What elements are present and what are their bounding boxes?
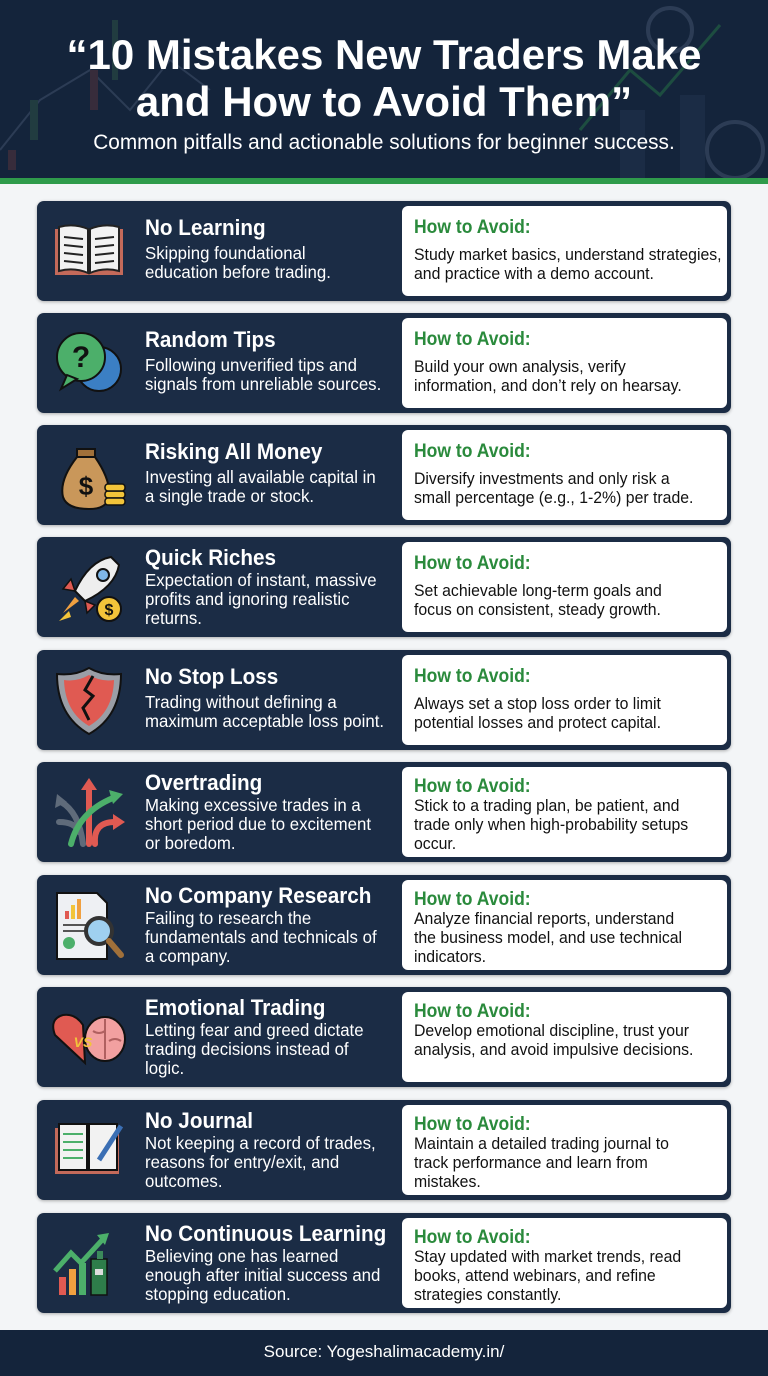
icon: heart vs brain xyxy=(52,1014,126,1066)
how to avoid box: How to Avoid: xyxy=(414,552,531,574)
how to avoid box: books, attend webinars, and refine xyxy=(414,1266,656,1284)
header xyxy=(0,0,768,178)
icon: journal with pen xyxy=(55,1123,123,1174)
mistake description: trading decisions instead of xyxy=(145,1039,349,1059)
card 3: Risking All Money xyxy=(37,425,731,525)
how to avoid box: indicators. xyxy=(414,946,486,966)
mistake title: No Learning xyxy=(145,215,266,240)
card 7: No Company Research xyxy=(37,875,731,975)
how to avoid box: How to Avoid: xyxy=(414,1000,531,1022)
icon: report with magnifier xyxy=(56,892,124,960)
icon: money bag xyxy=(61,448,126,510)
mistake description: maximum acceptable loss point. xyxy=(145,711,384,731)
how to avoid box xyxy=(402,655,727,745)
mistake description: profits and ignoring realistic xyxy=(145,589,350,609)
icon: money bag: $ xyxy=(79,471,94,501)
mistake description: Trading without defining a xyxy=(145,692,337,712)
mistake description: a single trade or stock. xyxy=(145,486,314,506)
how to avoid box: Maintain a detailed trading journal to xyxy=(414,1134,669,1152)
how to avoid box xyxy=(402,1218,727,1308)
mistake description: education before trading. xyxy=(145,262,331,282)
how to avoid box: How to Avoid: xyxy=(414,216,531,238)
how to avoid box: How to Avoid: xyxy=(414,665,531,687)
how to avoid box: How to Avoid: xyxy=(414,775,531,797)
how to avoid box xyxy=(402,206,727,296)
mistake title: Emotional Trading xyxy=(145,995,325,1020)
how to avoid box: track performance and learn from xyxy=(414,1152,648,1172)
mistake description: short period due to excitement xyxy=(145,814,371,834)
mistake description xyxy=(145,692,384,731)
subtitle: Common pitfalls and actionable solutions for beginner success. xyxy=(93,131,675,154)
how to avoid box: How to Avoid: xyxy=(414,440,531,462)
mistake description: Believing one has learned xyxy=(145,1246,338,1266)
how to avoid box: Always set a stop loss order to limit xyxy=(414,694,661,712)
mistake description xyxy=(145,467,376,506)
mistake description xyxy=(145,1246,380,1304)
title: and How to Avoid Them” xyxy=(136,78,632,125)
icon: broken shield xyxy=(56,667,122,735)
mistake description: outcomes. xyxy=(145,1171,223,1191)
mistake description: logic. xyxy=(145,1058,184,1078)
how to avoid box: Build your own analysis, verify xyxy=(414,356,626,376)
icon: heart vs brain: VS xyxy=(74,1034,93,1050)
icon: rocket xyxy=(59,556,122,622)
how to avoid box: the business model, and use technical xyxy=(414,928,682,946)
how to avoid box: and practice with a demo account. xyxy=(414,264,654,282)
how to avoid box: How to Avoid: xyxy=(414,1226,531,1248)
how to avoid box xyxy=(402,430,727,520)
mistake description: Following unverified tips and xyxy=(145,355,357,375)
how to avoid box: information, and don’t rely on hearsay. xyxy=(414,376,682,394)
how to avoid box xyxy=(402,318,727,408)
how to avoid box: Set achievable long-term goals and xyxy=(414,580,662,600)
mistake title: No Continuous Learning xyxy=(145,1221,386,1246)
mistake description xyxy=(145,355,381,394)
mistake description: stopping education. xyxy=(145,1284,291,1304)
card 1: No Learning xyxy=(37,201,731,301)
how to avoid box: analysis, and avoid impulsive decisions. xyxy=(414,1040,693,1058)
mistake title: Quick Riches xyxy=(145,545,276,570)
mistake description: or boredom. xyxy=(145,833,236,853)
how to avoid box: mistakes. xyxy=(414,1172,481,1190)
icon: speech bubbles: ? xyxy=(72,341,90,374)
icon: rocket: $ xyxy=(105,602,114,619)
card 10: No Continuous Learning xyxy=(37,1213,731,1313)
mistake description: Skipping foundational xyxy=(145,243,306,263)
how to avoid box xyxy=(402,992,727,1082)
how to avoid box: small percentage (e.g., 1-2%) per trade. xyxy=(414,488,693,506)
mistake description: signals from unreliable sources. xyxy=(145,374,381,394)
mistake title: No Company Research xyxy=(145,883,371,908)
mistake description xyxy=(145,908,377,966)
how to avoid box xyxy=(402,542,727,632)
mistake description xyxy=(145,570,377,628)
how to avoid box xyxy=(402,767,727,857)
mistake description: Letting fear and greed dictate xyxy=(145,1020,364,1040)
card 4: Quick Riches xyxy=(37,537,731,637)
mistake title: No Stop Loss xyxy=(145,664,278,689)
icon: speech bubbles xyxy=(56,332,122,392)
mistake description: a company. xyxy=(145,946,231,966)
mistake description: Investing all available capital in xyxy=(145,467,376,487)
how to avoid box: strategies constantly. xyxy=(414,1284,561,1304)
footer: source xyxy=(0,1330,768,1376)
how to avoid box: Study market basics, understand strategies, xyxy=(414,244,722,264)
how to avoid box: How to Avoid: xyxy=(414,1113,531,1135)
card 9: No Journal xyxy=(37,1100,731,1200)
card 6: Overtrading xyxy=(37,762,731,862)
mistake description: reasons for entry/exit, and xyxy=(145,1152,339,1172)
mistake title: Risking All Money xyxy=(145,439,322,464)
mistake title: Overtrading xyxy=(145,770,262,795)
how to avoid box: Diversify investments and only risk a xyxy=(414,468,670,488)
how to avoid box: occur. xyxy=(414,834,456,852)
how to avoid box: Develop emotional discipline, trust your xyxy=(414,1020,689,1040)
mistake description: Not keeping a record of trades, xyxy=(145,1133,376,1153)
how to avoid box: Analyze financial reports, understand xyxy=(414,908,674,928)
mistake description: Making excessive trades in a xyxy=(145,795,361,815)
card 5: No Stop Loss xyxy=(37,650,731,750)
mistake title: Random Tips xyxy=(145,327,276,352)
mistake title: No Journal xyxy=(145,1108,253,1133)
how to avoid box: potential losses and protect capital. xyxy=(414,712,661,732)
icon: arrows xyxy=(55,778,125,847)
mistake description: enough after initial success and xyxy=(145,1265,380,1285)
card 2: Random Tips xyxy=(37,313,731,413)
how to avoid box xyxy=(402,1105,727,1195)
icon: growth chart with books xyxy=(53,1233,109,1296)
title xyxy=(66,31,702,125)
how to avoid box: Stay updated with market trends, read xyxy=(414,1246,681,1266)
icon: book xyxy=(55,224,123,275)
how to avoid box xyxy=(402,880,727,970)
mistake description xyxy=(145,1020,364,1078)
how to avoid box: How to Avoid: xyxy=(414,888,531,910)
card 8: Emotional Trading xyxy=(37,987,731,1087)
mistake description: Expectation of instant, massive xyxy=(145,570,377,590)
how to avoid box: focus on consistent, steady growth. xyxy=(414,600,661,618)
mistake description: Failing to research the xyxy=(145,908,311,928)
mistake description xyxy=(145,1133,376,1191)
mistake description xyxy=(145,243,331,282)
footer: source: Source: Yogeshalimacademy.in/ xyxy=(264,1342,504,1361)
mistake description xyxy=(145,795,371,853)
mistake description: fundamentals and technicals of xyxy=(145,927,377,947)
how to avoid box: How to Avoid: xyxy=(414,328,531,350)
title: “10 Mistakes New Traders Make xyxy=(66,31,702,78)
how to avoid box: Stick to a trading plan, be patient, and xyxy=(414,796,679,814)
how to avoid box: trade only when high-probability setups xyxy=(414,814,688,834)
mistake description: returns. xyxy=(145,608,202,628)
